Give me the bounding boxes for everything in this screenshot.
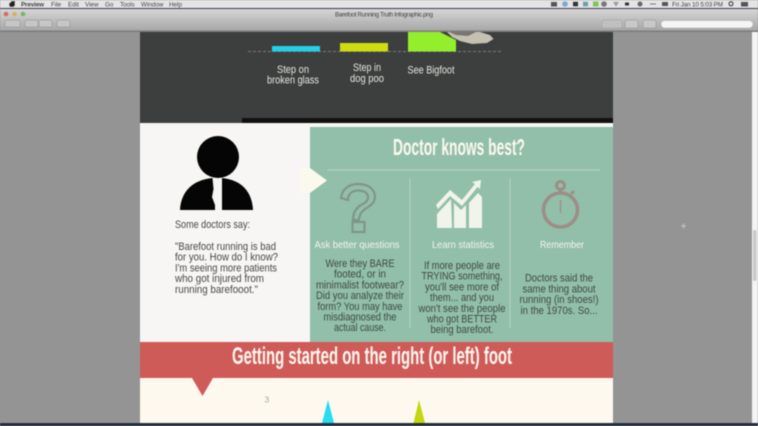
label: see Bigfoot: See Bigfoot <box>408 64 454 76</box>
column: learn statistics: won't see the people <box>418 303 506 315</box>
chart spike: yellow <box>414 400 425 423</box>
column: ask better questions <box>314 239 404 334</box>
column: learn statistics <box>418 239 506 336</box>
column: remember: Remember <box>540 239 584 251</box>
column: ask better questions: Did you analyze their <box>316 290 404 302</box>
icon: question mark <box>341 184 375 232</box>
preview window toolbar <box>0 9 758 32</box>
label: step in dog poo: Step in <box>353 62 381 74</box>
column: learn statistics: If more people are <box>424 260 500 272</box>
bar: step in dog poo <box>340 43 388 52</box>
bar: step on broken glass <box>272 46 320 52</box>
menu bar: Window <box>141 1 164 8</box>
column: learn statistics: Learn statistics <box>432 239 494 251</box>
icon: stopwatch <box>544 182 578 227</box>
column: remember: same thing about <box>522 283 596 295</box>
column: remember <box>520 239 598 317</box>
panel: dark chart section <box>140 32 613 123</box>
menu bar: Fri Jan 10 5:03 PM <box>672 1 723 8</box>
icon: Bigfoot shoe <box>447 32 494 44</box>
label: step on broken glass <box>267 64 319 86</box>
menu bar: Preview <box>21 1 44 8</box>
column: ask better questions: footed, or in <box>334 269 386 281</box>
column: learn statistics: being barefoot. <box>430 324 494 336</box>
text: doctor quote <box>174 241 278 296</box>
label: step in dog poo <box>350 62 384 85</box>
panel: doctors say <box>140 123 613 342</box>
panel: doctor knows best <box>300 127 613 342</box>
column: learn statistics: them... and you <box>430 292 494 304</box>
text: doctor quote: who got injured from <box>174 273 264 285</box>
menu bar <box>0 0 758 9</box>
column: ask better questions: form? You may have <box>318 301 402 313</box>
column: learn statistics: you'll see more of <box>425 281 500 293</box>
cursor icon <box>681 224 686 228</box>
banner pointer <box>192 378 213 396</box>
text: doctor quote: running barefooot." <box>175 284 258 296</box>
heading: doctor knows best: Doctor knows best? <box>393 134 525 160</box>
icon: doctor silhouette <box>180 136 253 210</box>
menu bar: View <box>85 1 99 8</box>
preview window toolbar: Barefoot Running Truth Infographic.png <box>335 12 433 18</box>
scrollbar thumb <box>753 230 756 281</box>
label: step on broken glass: broken glass <box>267 74 319 86</box>
panel: getting started <box>140 342 613 423</box>
icon: rising chart <box>436 180 482 228</box>
bar: see Bigfoot <box>408 32 456 52</box>
column: ask better questions: Ask better questions <box>314 239 400 251</box>
column: ask better questions: actual cause. <box>334 322 386 334</box>
text: doctor quote: I'm seeing more patients <box>175 262 277 274</box>
menu bar: Help <box>169 1 182 8</box>
arrow: pointer into panel <box>300 168 327 193</box>
column: ask better questions: minimalist footwear? <box>316 279 404 291</box>
text: doctor quote: for you. How do I know? <box>175 252 278 264</box>
number 3: 3 <box>264 394 270 404</box>
column: ask better questions: misdiagnosed the <box>324 312 396 324</box>
column: learn statistics: who got BETTER <box>426 314 497 326</box>
label: step in dog poo: dog poo <box>350 73 384 85</box>
menu bar: Edit <box>68 1 79 8</box>
text: some doctors say: Some doctors say: <box>175 219 250 231</box>
label: step on broken glass: Step on <box>277 64 309 76</box>
column: ask better questions: Were they BARE <box>326 258 394 270</box>
banner: getting started heading <box>140 342 613 378</box>
column: remember: Doctors said the <box>525 272 593 284</box>
menu bar: File <box>51 1 62 8</box>
menu bar: Tools <box>120 1 135 8</box>
column: remember: in the 1970s. So... <box>520 305 598 317</box>
chart spike: cyan <box>322 400 334 423</box>
column: remember: running (in shoes!) <box>520 294 598 306</box>
menu bar: Go <box>105 1 114 8</box>
heading text: Getting started on the right (or left) foot <box>232 343 512 370</box>
text: doctor quote: "Barefoot running is bad <box>175 241 276 253</box>
column: learn statistics: TRYING something, <box>422 271 502 283</box>
